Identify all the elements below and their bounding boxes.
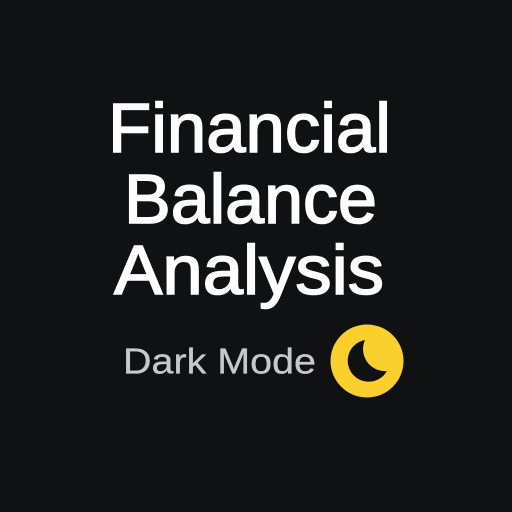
icon: moon badge [330,324,404,398]
subtitle: Dark Mode: Dark Mode [123,340,316,382]
title: Balance [124,160,377,238]
title: Analysis [114,231,384,309]
title [108,89,391,309]
title: Financial [108,89,391,167]
